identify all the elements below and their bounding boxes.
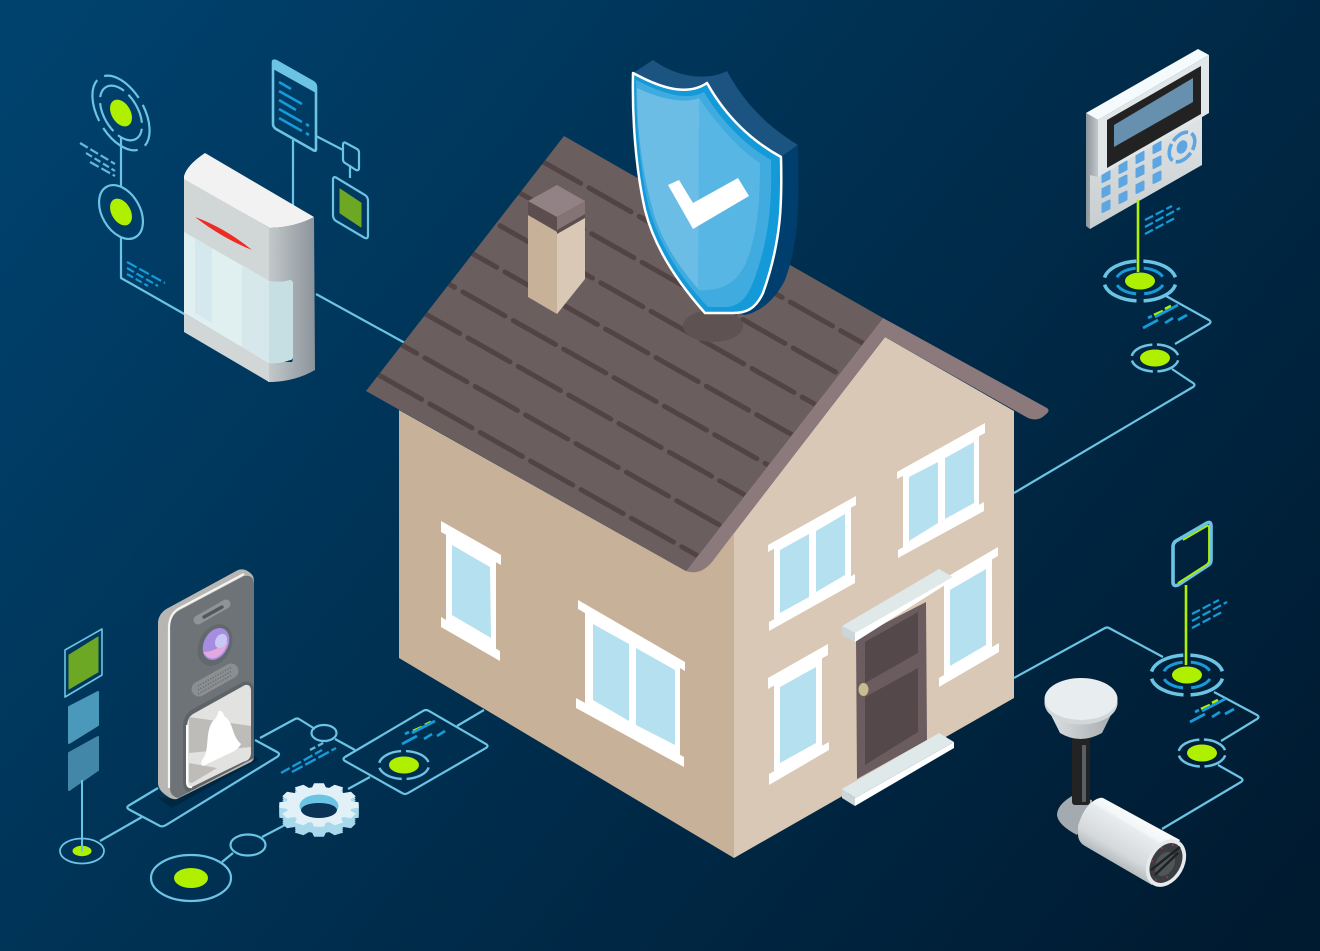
house (366, 136, 1049, 858)
data dashes: top-left (80, 143, 165, 286)
doorbell slot (198, 604, 226, 620)
node: large bottom ring (151, 855, 231, 901)
shield with check mark (633, 60, 798, 342)
security camera (1044, 678, 1194, 894)
base plate under doorbell (127, 740, 279, 826)
icon: bell (201, 711, 241, 766)
front door (856, 602, 927, 779)
house left wall (399, 410, 734, 858)
node: top-left ring (90, 177, 152, 247)
node: connector circle (312, 725, 336, 741)
roof (366, 136, 883, 571)
node cluster: keypad (1104, 200, 1187, 372)
status cards stack (65, 629, 102, 790)
door step (842, 733, 954, 806)
alarm motion sensor (184, 153, 315, 382)
chimney (528, 185, 585, 314)
data dashes: card (402, 721, 445, 744)
window: right wall upper right (897, 423, 985, 558)
doorbell camera lens (191, 618, 239, 672)
window: left wall small (441, 521, 501, 661)
icon: small square node (343, 142, 359, 170)
house right wall (734, 337, 1014, 858)
roof gable trim (686, 318, 1049, 572)
connector lines: network wiring (100, 136, 1258, 862)
video doorbell (157, 569, 258, 808)
doorbell speaker (198, 667, 232, 694)
icon: green card (333, 177, 368, 238)
data card with target (344, 710, 488, 794)
window: right wall upper left (768, 496, 856, 631)
node: bottom-left small ring (60, 780, 104, 864)
window: right wall beside door (939, 547, 999, 687)
data dashes: keypad (1143, 206, 1187, 328)
keypad control panel (1086, 49, 1209, 229)
node: connector circle lower (230, 834, 266, 856)
window: left wall large (576, 600, 685, 767)
icon: document card (273, 61, 316, 151)
icon: gear (279, 783, 359, 837)
door lintel (842, 569, 953, 642)
data dashes: doorbell (281, 741, 336, 773)
node: top-left concentric target (81, 66, 161, 160)
keypad dial (1164, 127, 1200, 167)
window: right wall lower left (768, 644, 829, 785)
doorbell button (183, 682, 254, 792)
node cluster: camera (1151, 522, 1234, 766)
data dashes: camera (1190, 600, 1234, 722)
keypad buttons (1102, 142, 1160, 212)
